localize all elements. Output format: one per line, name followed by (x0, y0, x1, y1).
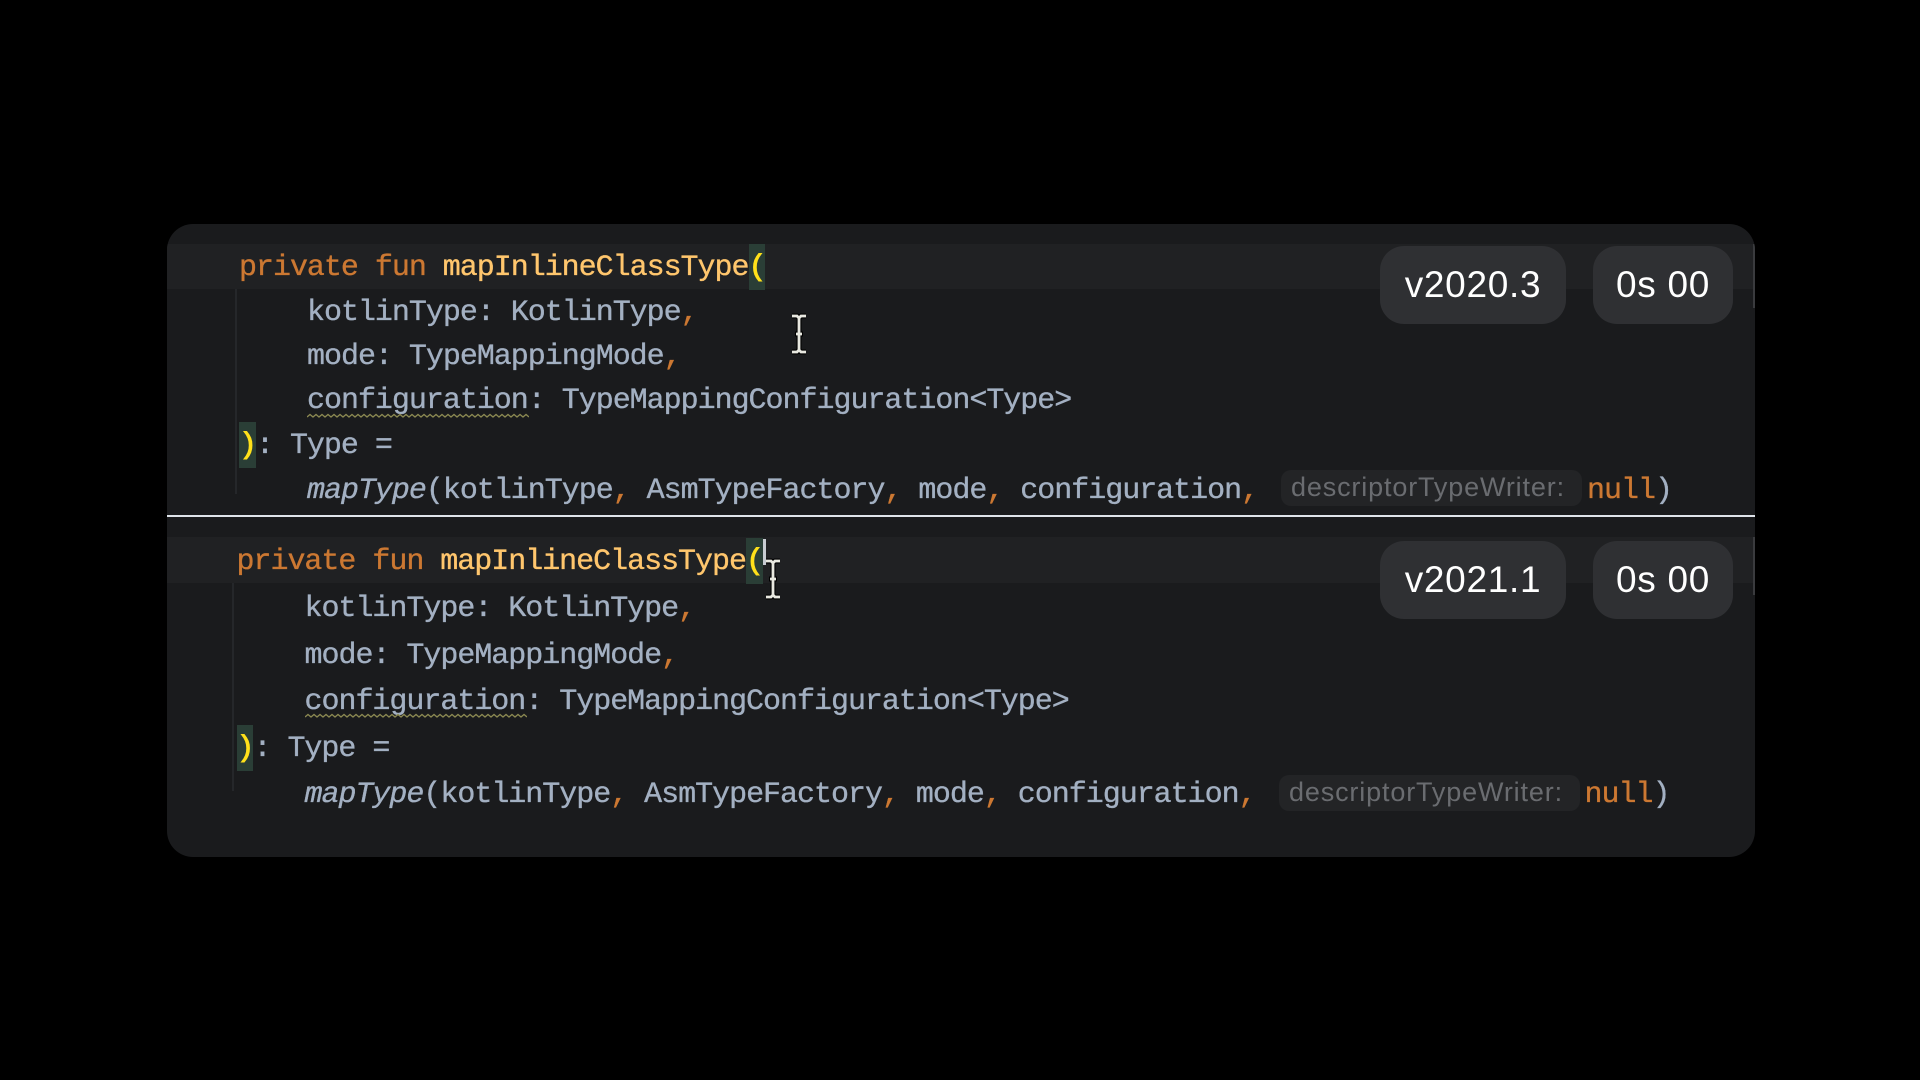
code line: mapType call: mapType(kotlinType, AsmTypeFactory, mode, configuration, (304, 778, 1256, 812)
panel section: version 2021.1 editor (232, 537, 1755, 812)
badge: version (1380, 541, 1566, 619)
badge: timer: 0s 00 (1616, 559, 1710, 600)
divider line (167, 515, 1755, 517)
icon: text cursor (766, 558, 780, 600)
code line: configuration: configuration: TypeMappingConfiguration<Type> (307, 384, 1071, 418)
badge: timer (1593, 541, 1733, 619)
inlay hint: descriptorTypeWriter: (1289, 777, 1563, 807)
code line: mode: mode: TypeMappingMode, (304, 639, 678, 673)
panel section: version 2020.3 editor (167, 244, 1755, 508)
code line: function signature: private fun mapInlineClassType (239, 251, 748, 285)
badge: timer (1593, 246, 1733, 324)
code line: kotlinType: kotlinType: KotlinType, (304, 592, 695, 626)
squiggle underline (305, 714, 527, 718)
icon: text cursor (792, 314, 806, 354)
current line highlight (167, 244, 1755, 289)
code line: return type (236, 725, 389, 771)
code line: function signature: ( (748, 251, 765, 285)
code line: function signature: ( (746, 545, 763, 579)
code line: return type: : Type = (256, 429, 392, 463)
text caret (763, 539, 766, 565)
badge: version: v2021.1 (1405, 559, 1541, 600)
right edge mark (1753, 537, 1755, 595)
code line: mapType call: mapType(kotlinType, AsmTypeFactory, mode, configuration, (307, 474, 1258, 508)
squiggle underline (307, 414, 529, 418)
code line: return type: : Type = (253, 732, 389, 766)
code line: return type: ) (236, 732, 253, 766)
code line: return type: ) (239, 429, 256, 463)
code line: mode: mode: TypeMappingMode, (307, 340, 681, 374)
code line: function signature: private fun mapInlineClassType (236, 545, 746, 579)
current line highlight (167, 537, 1755, 583)
code line: configuration: configuration: TypeMappingConfiguration<Type> (304, 685, 1069, 719)
code line: kotlinType: kotlinType: KotlinType, (307, 296, 698, 330)
code: null argument: null) (1584, 778, 1669, 812)
code: null argument: null) (1587, 474, 1672, 508)
inlay hint: descriptorTypeWriter: (1291, 472, 1565, 502)
badge: version (1380, 246, 1566, 324)
badge: timer: 0s 00 (1616, 264, 1710, 305)
panel: code comparison (167, 224, 1755, 857)
code line: return type (239, 422, 392, 468)
indent guide (235, 289, 237, 494)
right edge mark (1753, 244, 1755, 308)
indent guide (232, 583, 234, 791)
badge: version: v2020.3 (1405, 264, 1541, 305)
